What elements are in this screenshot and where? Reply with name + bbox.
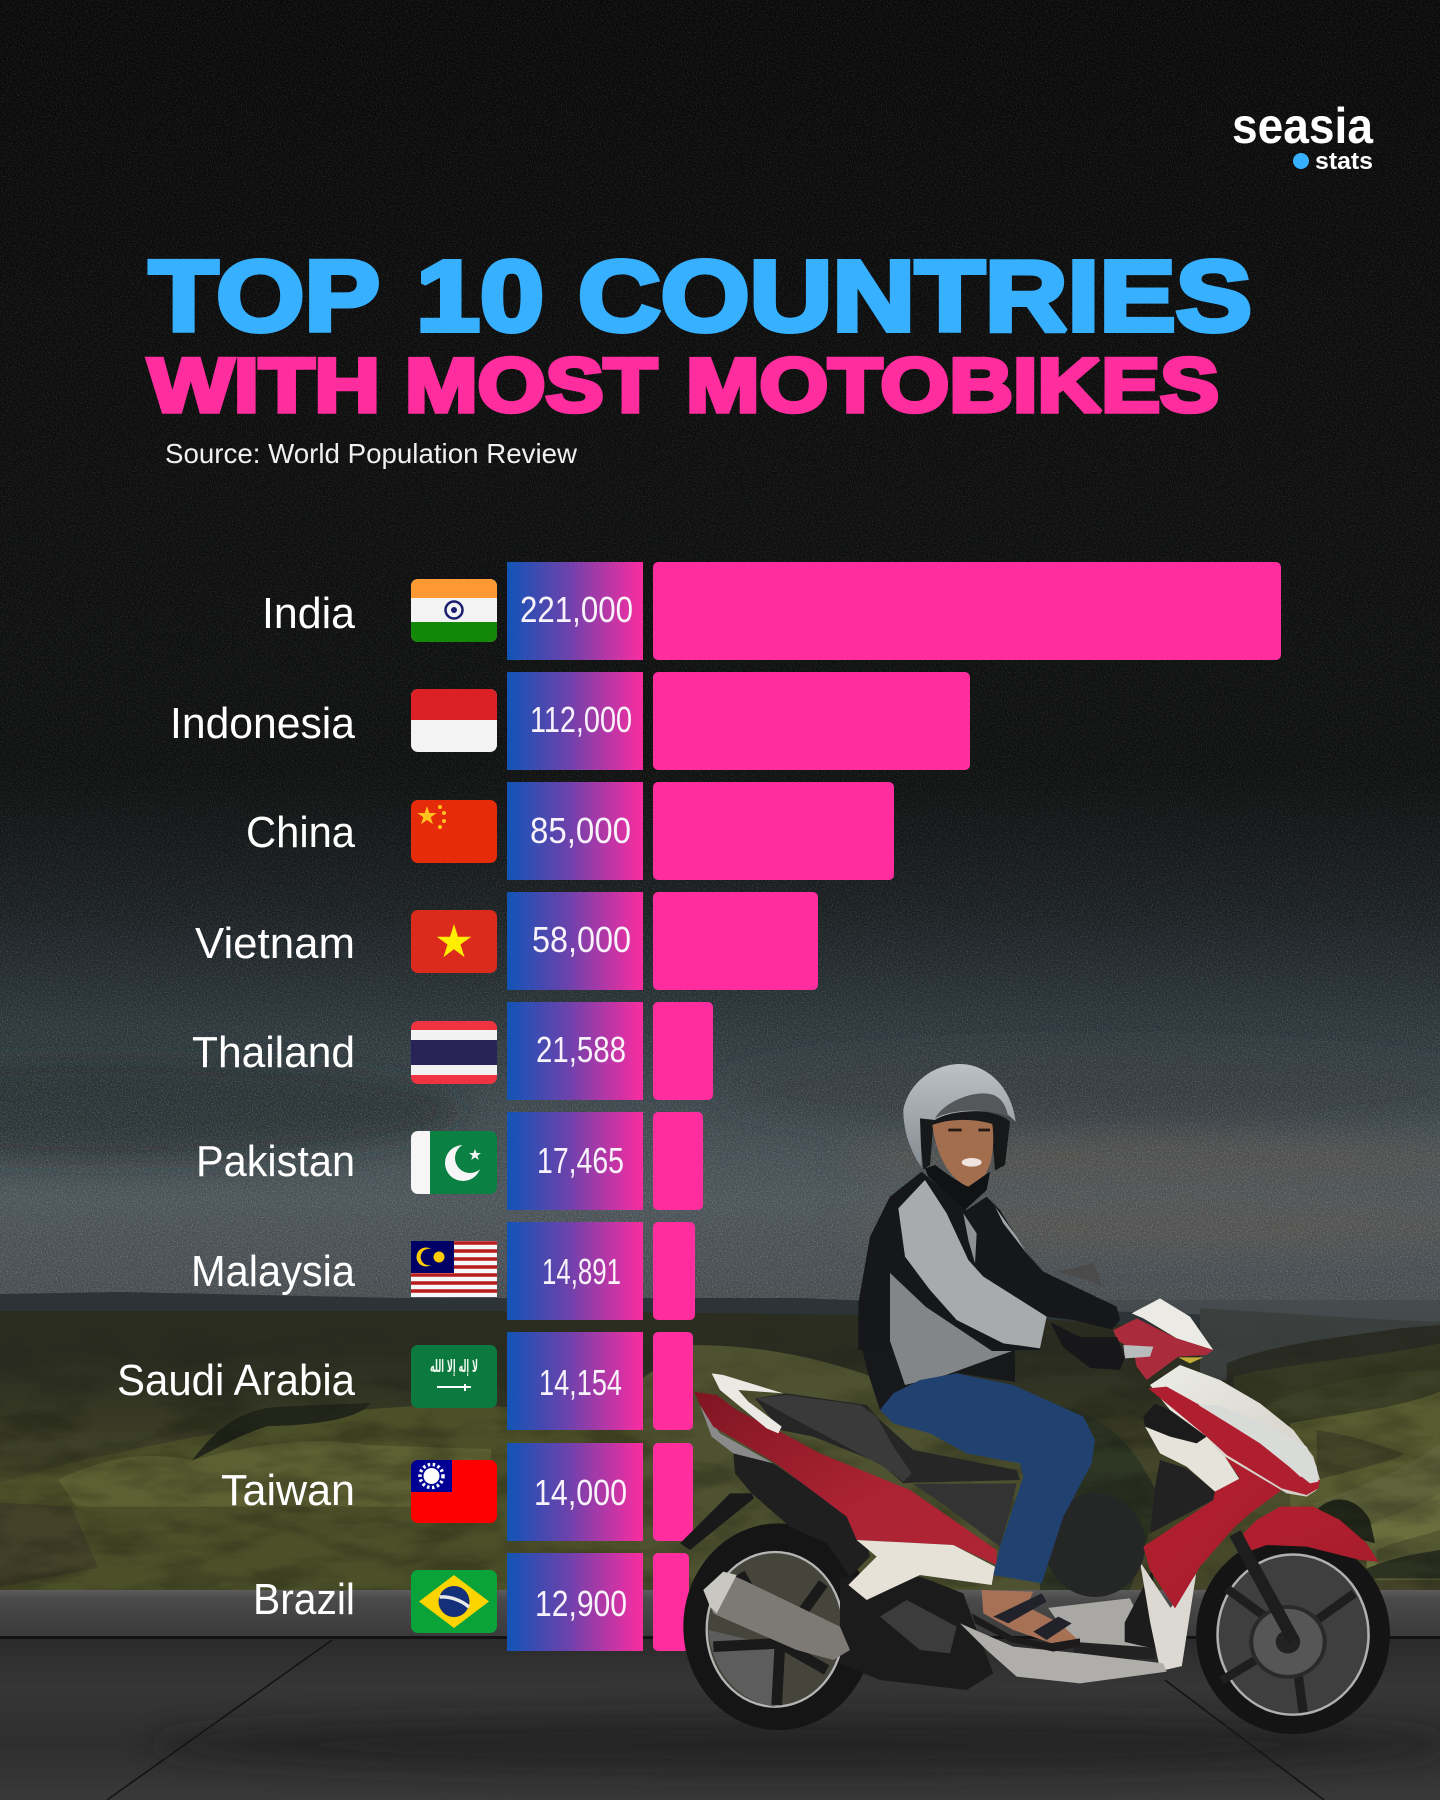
under-seat plastic xyxy=(913,1483,1017,1547)
row: China: China xyxy=(246,808,355,857)
helmet shell xyxy=(903,1064,1016,1167)
row: China: 85,000 xyxy=(530,810,631,851)
flag: Saudi Arabia: لا إله إلا الله xyxy=(430,1357,478,1377)
mirror xyxy=(1057,1263,1103,1287)
scooter front wheel and floor recess xyxy=(1048,1535,1390,1734)
row: Saudi Arabia xyxy=(117,1332,693,1430)
row: Thailand: Thailand xyxy=(192,1028,355,1077)
lower plate xyxy=(960,1623,1167,1683)
flag: Taiwan xyxy=(411,1460,497,1523)
logo: seasia stats xyxy=(1232,98,1374,175)
engine xyxy=(840,1577,993,1690)
rider torso xyxy=(858,1172,1120,1350)
headlight xyxy=(1198,1405,1318,1483)
row: India: 221,000 xyxy=(520,589,633,630)
nose lamp xyxy=(1123,1345,1153,1358)
scooter rear wheel and strut xyxy=(680,1493,873,1730)
title xyxy=(148,240,1252,428)
face xyxy=(932,1120,993,1187)
windscreen xyxy=(1132,1298,1213,1350)
row: Taiwan xyxy=(221,1443,693,1541)
row: Malaysia xyxy=(191,1222,695,1320)
collar xyxy=(925,1165,990,1210)
hills right, drawn on a zoomed grid xyxy=(1200,1308,1440,1580)
red lower fairing xyxy=(1143,1457,1282,1608)
white side panel xyxy=(848,1540,995,1600)
rider head and helmet xyxy=(903,1064,1016,1210)
row: Indonesia: 112,000 xyxy=(530,699,632,740)
flag: Malaysia xyxy=(411,1241,497,1297)
rider jacket hem xyxy=(858,1330,1015,1410)
row: Vietnam: 58,000 xyxy=(532,919,631,960)
logo: seasia stats: seasia xyxy=(1232,98,1374,154)
indicator xyxy=(1178,1357,1203,1363)
row: India xyxy=(262,562,1281,660)
row: Saudi Arabia: Saudi Arabia xyxy=(117,1356,355,1405)
row: China xyxy=(246,782,894,880)
illustration: rider on red scooter xyxy=(680,1064,1390,1734)
glove xyxy=(1050,1322,1125,1370)
flag: China xyxy=(411,800,497,863)
jeans xyxy=(880,1373,1095,1583)
hills left, drawn on a zoomed grid xyxy=(0,1403,670,1591)
title: WITH xyxy=(148,344,380,428)
row: Pakistan xyxy=(196,1112,703,1210)
row: Indonesia xyxy=(170,672,970,770)
seat xyxy=(755,1393,1020,1483)
logo: seasia stats: stats xyxy=(1315,148,1373,175)
flag: Pakistan xyxy=(411,1131,497,1194)
flag: Saudi Arabia xyxy=(411,1345,497,1408)
row: Pakistan: Pakistan xyxy=(196,1137,355,1186)
row: Malaysia: 14,891 xyxy=(542,1251,621,1292)
title: MOTOBIKES xyxy=(686,344,1219,428)
red stripe xyxy=(1148,1387,1320,1495)
flag: Thailand xyxy=(411,1021,497,1084)
row: Vietnam: Vietnam xyxy=(195,919,355,968)
black inner xyxy=(1150,1460,1215,1533)
grey sleeve xyxy=(898,1180,1047,1348)
title: MOST xyxy=(405,344,657,428)
scooter front body xyxy=(1113,1298,1378,1640)
row: Taiwan: Taiwan xyxy=(221,1466,355,1515)
title: 10 xyxy=(416,240,544,352)
jacket grey lower panel xyxy=(890,1273,1012,1385)
sandal xyxy=(972,1613,1080,1652)
zip xyxy=(963,1213,977,1263)
eyes xyxy=(948,1126,990,1134)
row: Taiwan: 14,000 xyxy=(534,1472,627,1513)
row: Malaysia: Malaysia xyxy=(191,1247,355,1296)
fender xyxy=(1243,1507,1378,1562)
row: Vietnam xyxy=(195,892,818,990)
hills behind the rider xyxy=(640,1345,1100,1590)
row: Indonesia: Indonesia xyxy=(170,699,356,748)
top cowl xyxy=(1150,1365,1320,1497)
engine fins xyxy=(880,1600,957,1653)
row: Pakistan: 17,465 xyxy=(537,1140,624,1181)
black frame xyxy=(733,1453,870,1577)
flag: Brazil xyxy=(411,1570,497,1633)
helmet liner xyxy=(918,1111,1010,1171)
visor xyxy=(935,1093,1008,1118)
stored helmet xyxy=(1045,1493,1145,1597)
row: Brazil: 12,900 xyxy=(535,1583,627,1624)
title: TOP xyxy=(149,240,380,352)
white shield xyxy=(1145,1427,1240,1492)
scooter rear body xyxy=(694,1373,1167,1690)
bar chart xyxy=(117,562,1281,1651)
title: COUNTRIES xyxy=(578,240,1252,352)
row: Brazil: Brazil xyxy=(253,1575,355,1624)
rider lower body xyxy=(880,1373,1095,1652)
row: Thailand: 21,588 xyxy=(536,1029,626,1070)
row: Saudi Arabia: 14,154 xyxy=(539,1362,622,1403)
fork xyxy=(1235,1533,1293,1640)
flag: India xyxy=(411,579,497,642)
exhaust xyxy=(703,1572,850,1660)
row: Brazil xyxy=(253,1553,689,1651)
flag: Indonesia xyxy=(411,689,497,752)
row: India: India xyxy=(262,589,356,638)
flag: Vietnam xyxy=(411,910,497,973)
nose xyxy=(1113,1318,1213,1380)
red side panel xyxy=(694,1392,997,1565)
foot xyxy=(982,1590,1078,1645)
chest trim xyxy=(995,1207,1027,1253)
tail handle xyxy=(712,1373,783,1433)
tail light trim xyxy=(700,1405,773,1463)
icon: globe dot xyxy=(1293,153,1309,169)
source note: Source: World Population Review xyxy=(165,438,578,469)
jacket black xyxy=(858,1172,1120,1350)
smile xyxy=(962,1158,982,1167)
row: Thailand xyxy=(192,1002,713,1100)
